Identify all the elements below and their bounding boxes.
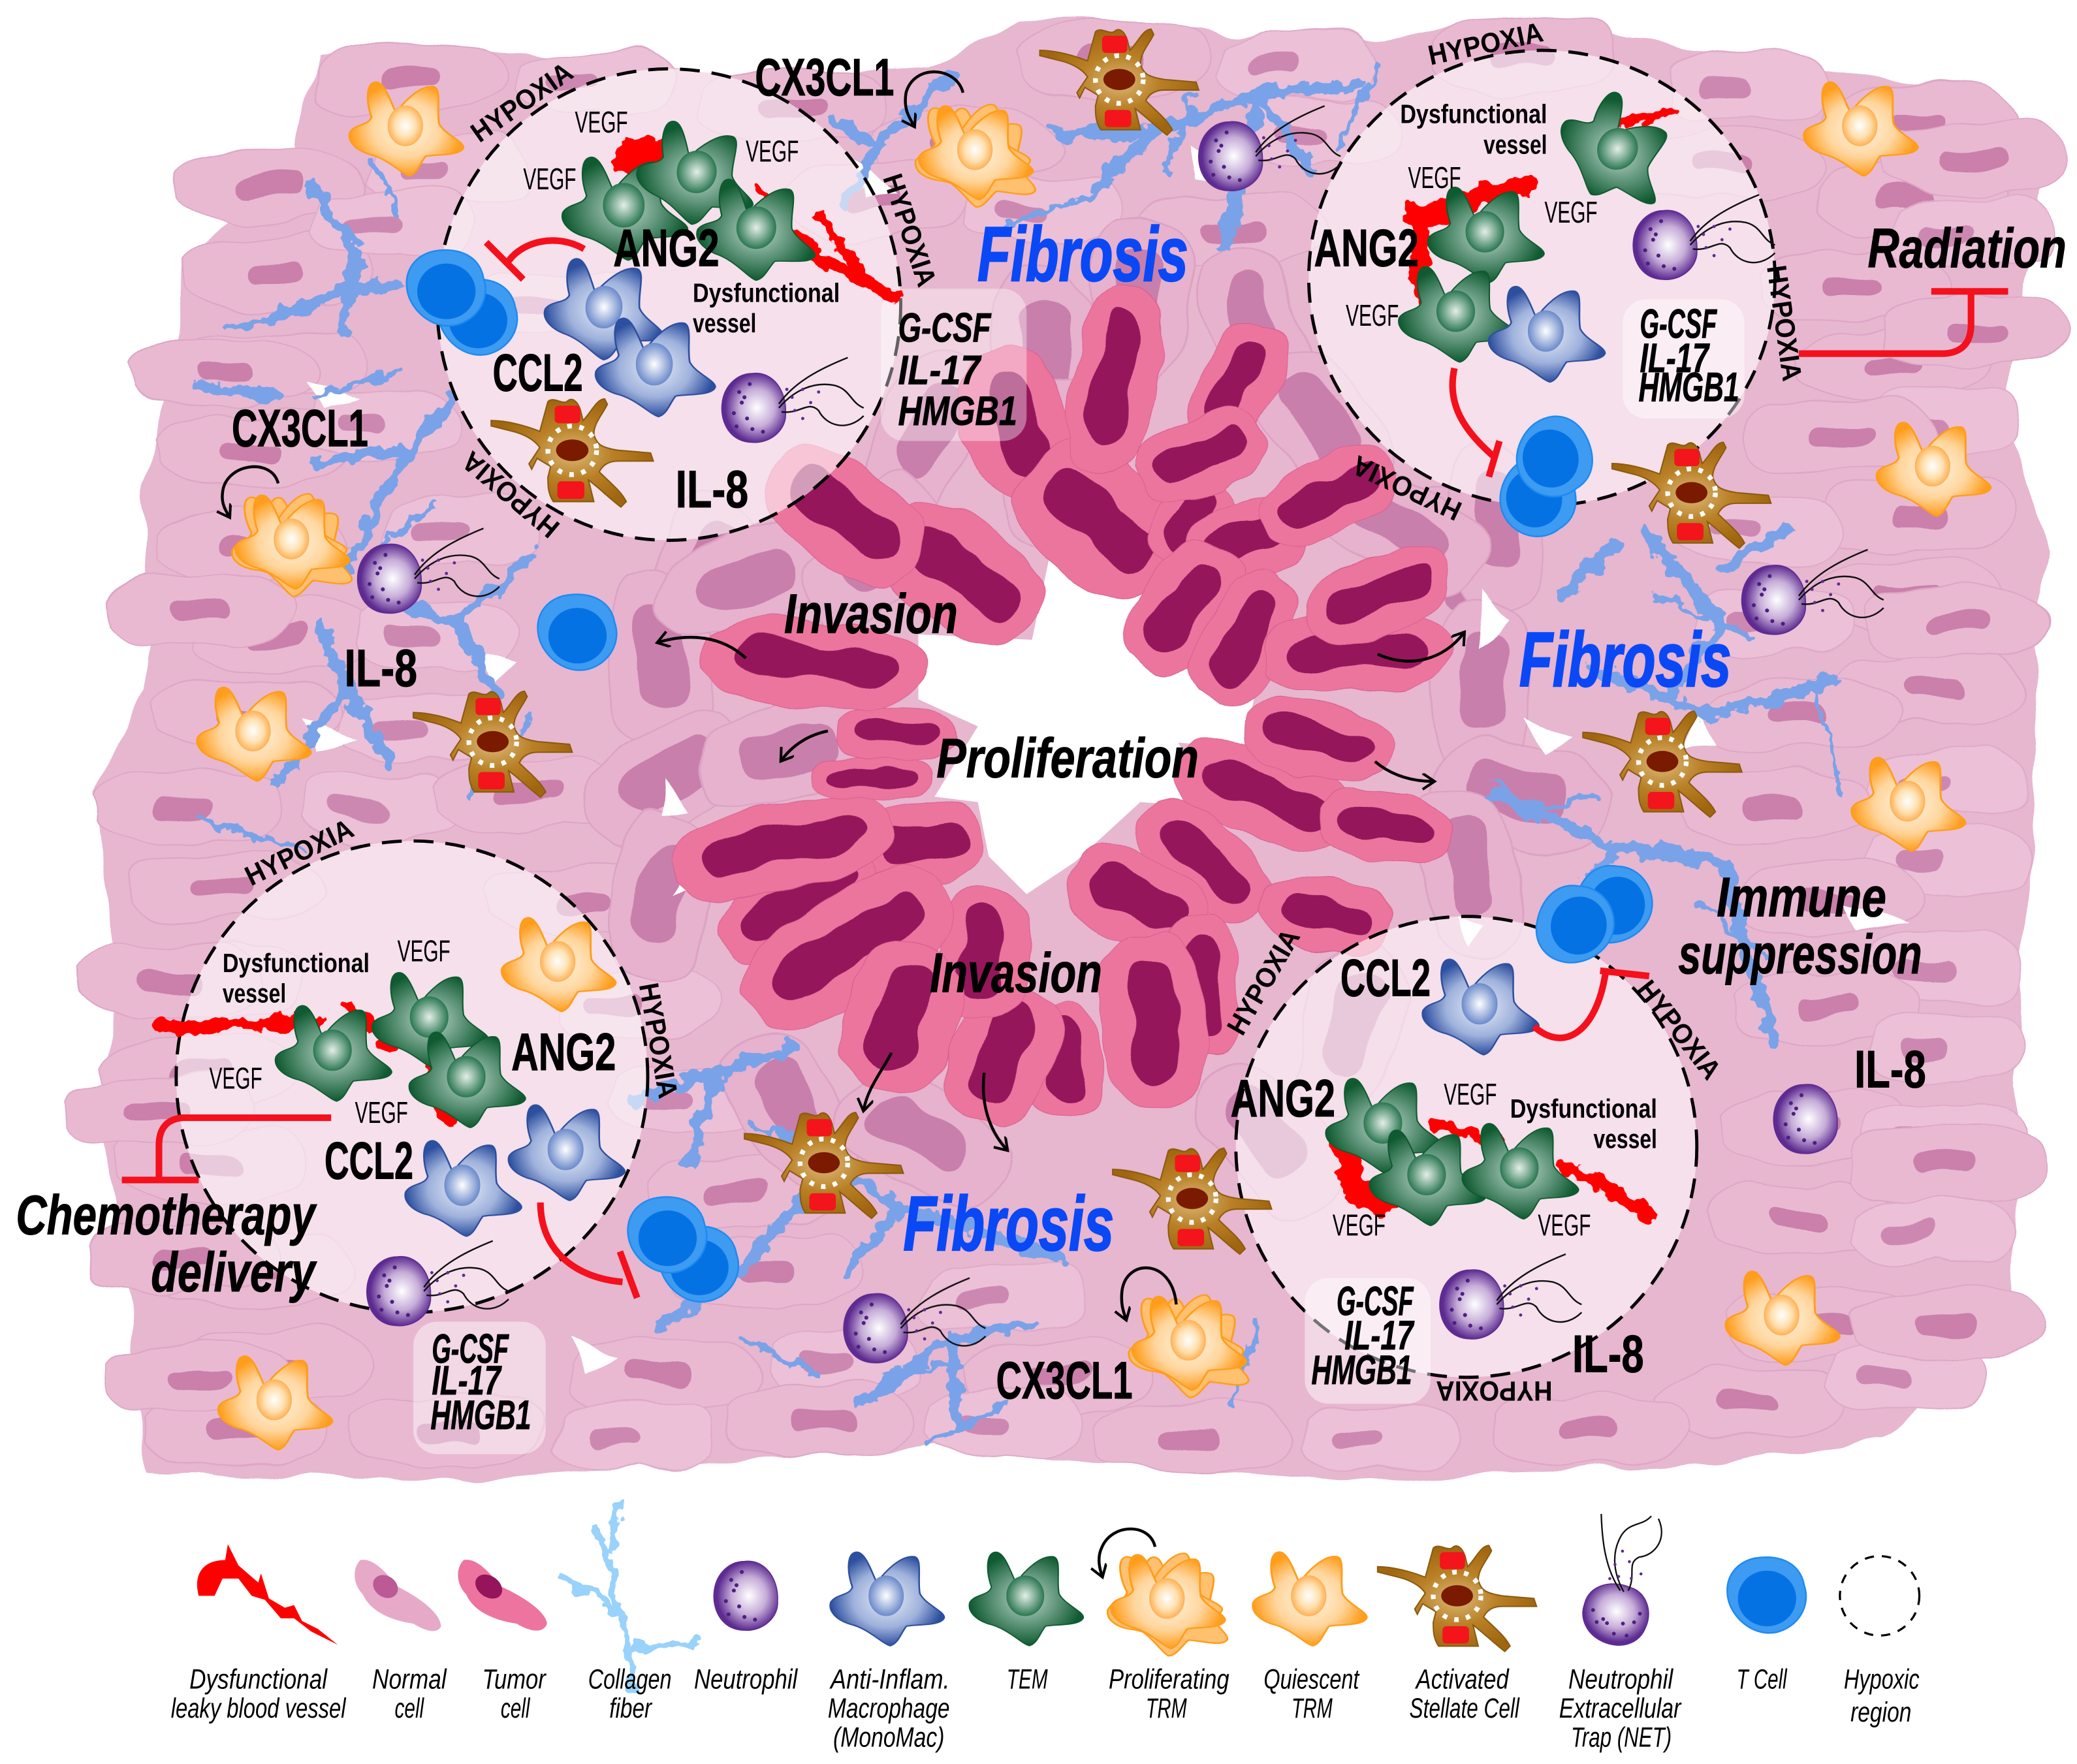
Chemotherapy delivery: delivery [151, 1242, 317, 1304]
legend text: macrophage: Anti-Inflam. [829, 1663, 950, 1695]
label HYPOXIA: HYPOXIA [456, 445, 565, 544]
vessel [159, 1007, 451, 1112]
cytokine box [1305, 1278, 1431, 1404]
arrow: invasion [864, 1053, 891, 1110]
cytokines: G-CSF [432, 1326, 509, 1372]
vessel [1418, 111, 1669, 318]
legend icon: TEM [970, 1552, 1083, 1646]
legend icon: stellate cell [1378, 1545, 1536, 1652]
cytokines [1639, 301, 1739, 411]
heading Fibrosis: Fibrosis [977, 211, 1188, 297]
legend text: neutrophil: Neutrophil [694, 1663, 799, 1695]
legend text: macrophage [828, 1663, 950, 1754]
legend text: vessel: Dysfunctional [189, 1663, 328, 1695]
legend icon: quiescent TRM [1253, 1552, 1367, 1646]
panel: hypoxic region top right [1308, 16, 1808, 526]
panel: hypoxic region bottom left [159, 813, 684, 1454]
VEGF: VEGF [210, 1061, 262, 1095]
cytokines: HMGB1 [1639, 365, 1739, 411]
arrow: self-renewal left [222, 467, 278, 516]
legend text: T cell: T Cell [1737, 1663, 1788, 1695]
dysfunctional vessel label: vessel [693, 308, 756, 338]
legend text: normal [372, 1663, 447, 1724]
panel: tumor center [664, 277, 1461, 1139]
dysfunctional vessel label [693, 278, 840, 338]
cytokines: HMGB1 [430, 1393, 531, 1438]
legend text: normal: cell [395, 1693, 424, 1724]
T cells [407, 250, 1663, 1302]
legend icon: proliferating TRM [1100, 1545, 1241, 1667]
cytokine box [881, 289, 1026, 441]
inhibition [486, 240, 584, 279]
legend text: quiescent [1263, 1663, 1360, 1724]
cytokines: IL-17 [1640, 336, 1710, 381]
lumen [918, 537, 1254, 894]
panel: hypoxic region bottom right [1221, 917, 1727, 1406]
cytokine box [413, 1321, 546, 1454]
legend icon: dysfunctional vessel [197, 1544, 338, 1645]
cytokines: HMGB1 [1311, 1347, 1412, 1393]
VEGF: VEGF [1544, 195, 1598, 229]
region outline [437, 69, 901, 541]
VEGF: VEGF [1346, 298, 1399, 332]
arrow: invasion [983, 1073, 1007, 1150]
dysfunctional vessel label: vessel [223, 979, 286, 1009]
arrow: invasion [658, 637, 746, 658]
macrophage [1489, 287, 1605, 382]
CCL2: CCL2 [325, 1131, 413, 1190]
inhibition [1534, 971, 1649, 1038]
VEGF: VEGF [1538, 1208, 1591, 1242]
cytokine box [1623, 299, 1745, 418]
arrow: invasion [1375, 761, 1433, 781]
VEGF: VEGF [746, 134, 799, 168]
Immune suppression: Immune [1717, 867, 1886, 929]
VEGF: VEGF [1444, 1077, 1497, 1111]
stellate cell [491, 399, 654, 507]
label HYPOXIA: HYPOXIA [240, 813, 358, 892]
VEGF: VEGF [398, 934, 451, 968]
VEGF: VEGF [575, 105, 628, 139]
ANG2: ANG2 [613, 219, 720, 278]
legend text: vessel [171, 1663, 347, 1724]
legend text: collagen: Collagen [588, 1663, 672, 1695]
collagen fibers [198, 66, 1841, 1443]
radiation inhibition [1799, 291, 2008, 354]
NET [1633, 195, 1775, 279]
vessel [1347, 1126, 1653, 1216]
macrophages [405, 1105, 625, 1236]
legend text: vessel: leaky blood vessel [171, 1693, 347, 1724]
IL-8 label: IL-8 [344, 639, 417, 698]
dysfunctional vessel label: Dysfunctional [1510, 1094, 1657, 1124]
legend text: quiescent: TRM [1292, 1693, 1333, 1724]
label HYPOXIA: HYPOXIA [1436, 1375, 1553, 1406]
inhibition [541, 1203, 637, 1298]
legend text: proliferating: Proliferating [1109, 1663, 1229, 1695]
label HYPOXIA: HYPOXIA [1760, 263, 1808, 383]
dysfunctional vessel label [1400, 99, 1547, 159]
neutrophil [1773, 1084, 1837, 1154]
legend text: stellate: Activated [1414, 1663, 1510, 1695]
cytokines: HMGB1 [898, 388, 1017, 434]
panel: hypoxic region top left [437, 56, 1026, 544]
dysfunctional vessel label [223, 948, 370, 1009]
arrow: self-renewal bottom [1122, 1268, 1176, 1319]
cytokines [898, 305, 1017, 434]
heading Fibrosis: Fibrosis [904, 1180, 1114, 1267]
legend icon: T cell [1727, 1557, 1806, 1633]
IL-8: IL-8 [1572, 1325, 1644, 1384]
cytokines: IL-17 [432, 1358, 502, 1404]
legend text: NET: Extracellular [1559, 1693, 1682, 1724]
legend text: normal: Normal [372, 1663, 447, 1695]
legend text: proliferating: TRM [1146, 1693, 1187, 1724]
legend icon: neutrophil [714, 1561, 778, 1630]
legend text: NET: Trap (NET) [1571, 1722, 1672, 1754]
label HYPOXIA: HYPOXIA [1348, 449, 1467, 526]
TEM cells [276, 973, 526, 1127]
NET cells [358, 106, 1884, 1362]
legend icon: macrophage [831, 1552, 944, 1646]
ANG2: ANG2 [1314, 219, 1419, 278]
inhibition [1453, 368, 1499, 477]
macrophages [541, 257, 715, 417]
legend text: hypoxic: Hypoxic [1844, 1663, 1920, 1695]
label HYPOXIA: HYPOXIA [1425, 16, 1546, 71]
legend text: hypoxic [1844, 1663, 1920, 1728]
macrophage [1423, 959, 1539, 1055]
quiescent TRM [501, 918, 616, 1011]
legend text: tumor [482, 1663, 547, 1724]
legend text: macrophage: (MonoMac) [833, 1722, 944, 1754]
Invasion: Invasion [930, 942, 1102, 1004]
IL-8 label: IL-8 [1854, 1040, 1926, 1099]
legend icon: NET [1561, 1500, 1682, 1654]
arrow: self-renewal top [906, 72, 963, 126]
Chemotherapy delivery [16, 1185, 317, 1304]
legend text: NET: Neutrophil [1568, 1663, 1674, 1695]
VEGF: VEGF [1333, 1208, 1386, 1242]
TEM cells [1326, 1079, 1579, 1225]
legend icon: hypoxic region [1840, 1556, 1920, 1635]
ANG2: ANG2 [1231, 1069, 1335, 1128]
CX3CL1 label: CX3CL1 [996, 1351, 1133, 1410]
cytokines: IL-17 [898, 347, 982, 393]
VEGF: VEGF [355, 1095, 408, 1129]
legend text: proliferating [1109, 1663, 1229, 1724]
legend text: tumor: cell [501, 1693, 531, 1724]
label HYPOXIA: HYPOXIA [1630, 975, 1727, 1086]
legend text: TEM: TEM [1007, 1663, 1048, 1695]
Immune suppression [1678, 867, 1922, 986]
cytokines [1311, 1278, 1415, 1393]
label HYPOXIA: HYPOXIA [1221, 924, 1307, 1041]
TEM cells [1399, 78, 1694, 362]
TEM cells [562, 117, 821, 285]
cytokines: G-CSF [898, 305, 992, 351]
dysfunctional vessel label: vessel [1483, 129, 1547, 159]
NET [1440, 1254, 1581, 1339]
cytokines [430, 1326, 531, 1438]
proliferating TRM cells [225, 96, 1262, 1409]
Invasion: Invasion [784, 584, 958, 646]
legend text: hypoxic: region [1850, 1697, 1911, 1728]
cytokines: G-CSF [1337, 1278, 1414, 1324]
dysfunctional vessel label: Dysfunctional [1400, 99, 1547, 129]
cytokines: IL-17 [1344, 1313, 1415, 1359]
vessel [629, 156, 898, 302]
IL-8: IL-8 [676, 460, 748, 519]
legend text: collagen: fiber [609, 1693, 653, 1724]
heading Fibrosis: Fibrosis [1519, 616, 1732, 702]
NET [367, 1241, 509, 1326]
dysfunctional vessel label [1510, 1094, 1657, 1154]
legend [171, 1500, 1920, 1754]
cytokines: G-CSF [1640, 301, 1717, 347]
CCL2: CCL2 [1340, 949, 1431, 1007]
CX3CL1 label: CX3CL1 [232, 400, 368, 458]
legend icon: collagen fiber [563, 1505, 695, 1688]
legend text: stellate: Stellate Cell [1410, 1693, 1520, 1724]
region outline [176, 841, 648, 1312]
NET [721, 358, 864, 443]
legend text: tumor: Tumor [482, 1663, 547, 1695]
region outline [1236, 917, 1697, 1378]
ANG2: ANG2 [511, 1023, 616, 1082]
Immune suppression: suppression [1678, 924, 1922, 986]
stellate cells [413, 29, 1771, 1254]
CCL2: CCL2 [493, 343, 583, 402]
dysfunctional vessel label: Dysfunctional [693, 278, 840, 308]
chemotherapy inhibition [122, 1118, 331, 1180]
arrow: invasion [782, 731, 828, 760]
region outline [1308, 50, 1775, 506]
tumor cell cluster [664, 277, 1461, 1139]
VEGF: VEGF [523, 162, 576, 196]
legend arrow [1099, 1529, 1155, 1576]
label HYPOXIA: HYPOXIA [633, 981, 684, 1101]
CX3CL1 label: CX3CL1 [755, 48, 894, 107]
legend icon: tumor cell [458, 1560, 547, 1631]
legend text: quiescent: Quiescent [1263, 1663, 1360, 1695]
Proliferation: Proliferation [936, 728, 1199, 790]
legend text: stellate [1410, 1663, 1520, 1724]
arrow: invasion [1378, 633, 1464, 661]
Chemotherapy delivery: Chemotherapy [16, 1185, 317, 1247]
legend icon: normal cell [355, 1560, 441, 1631]
label HYPOXIA: HYPOXIA [876, 170, 942, 291]
dysfunctional vessel label: Dysfunctional [223, 948, 370, 978]
quiescent TRM cells [197, 82, 1991, 1450]
VEGF: VEGF [1408, 161, 1461, 195]
dysfunctional vessel label: vessel [1594, 1124, 1657, 1154]
label HYPOXIA: HYPOXIA [466, 56, 579, 149]
legend text: macrophage: Macrophage [828, 1693, 950, 1724]
legend text: collagen [588, 1663, 672, 1724]
legend text: NET [1559, 1663, 1682, 1754]
